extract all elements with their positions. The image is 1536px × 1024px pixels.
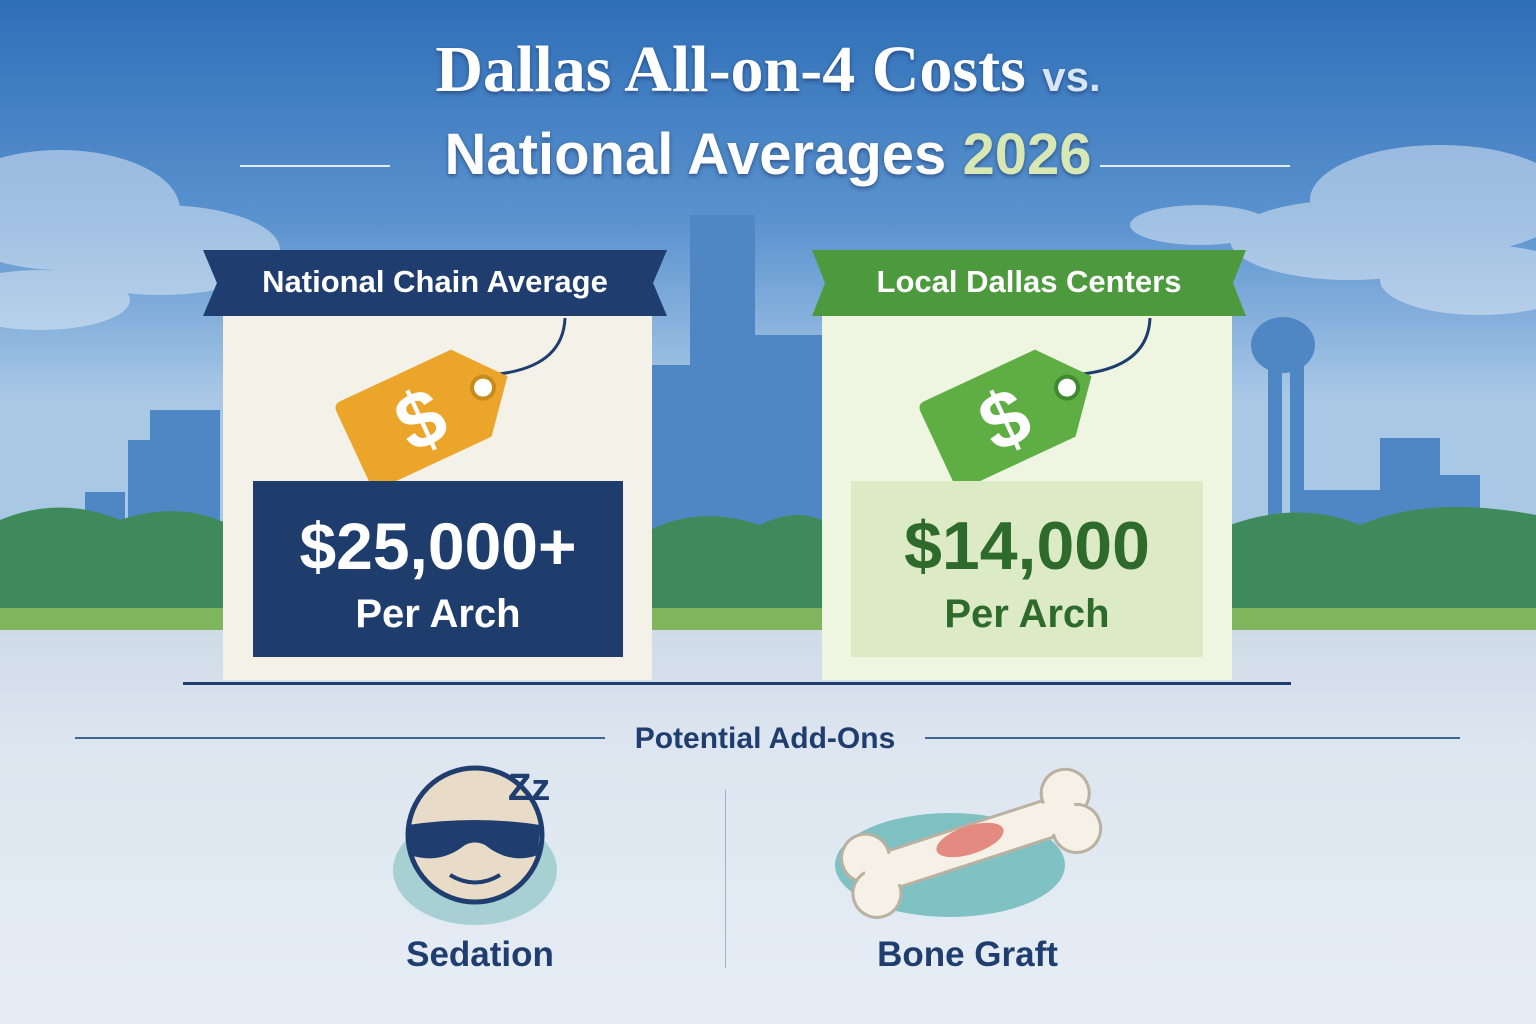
icon: orange price tag: $	[382, 370, 460, 469]
title: National Averages 2026	[445, 122, 1091, 187]
title: Dallas All-on-4 Costs vs.	[435, 33, 1101, 106]
icon: bone graft	[835, 768, 1102, 919]
heading: potential add-ons: Potential Add-Ons	[635, 722, 895, 755]
icon: green price tag	[919, 318, 1152, 481]
icon: sedation: Zz	[508, 767, 550, 809]
icon: green price tag: $	[966, 370, 1044, 469]
price box: local	[851, 481, 1203, 657]
label: sedation: Sedation	[406, 935, 554, 974]
price box: local: $14,000	[904, 508, 1150, 584]
price box: national: $25,000+	[299, 509, 577, 583]
price box: national: Per Arch	[355, 592, 521, 636]
banner: local: Local Dallas Centers	[877, 264, 1181, 299]
panel: local dallas	[812, 250, 1246, 680]
label: bone graft: Bone Graft	[877, 935, 1058, 974]
icon: sedation	[393, 766, 557, 925]
banner: local	[812, 250, 1246, 316]
banner: national: National Chain Average	[262, 264, 608, 299]
banner: national	[203, 250, 667, 316]
title	[435, 33, 1101, 191]
icon: orange price tag	[335, 318, 566, 481]
price box: national	[253, 481, 623, 657]
price box: local: Per Arch	[944, 592, 1110, 636]
panel: national chain	[203, 250, 667, 680]
